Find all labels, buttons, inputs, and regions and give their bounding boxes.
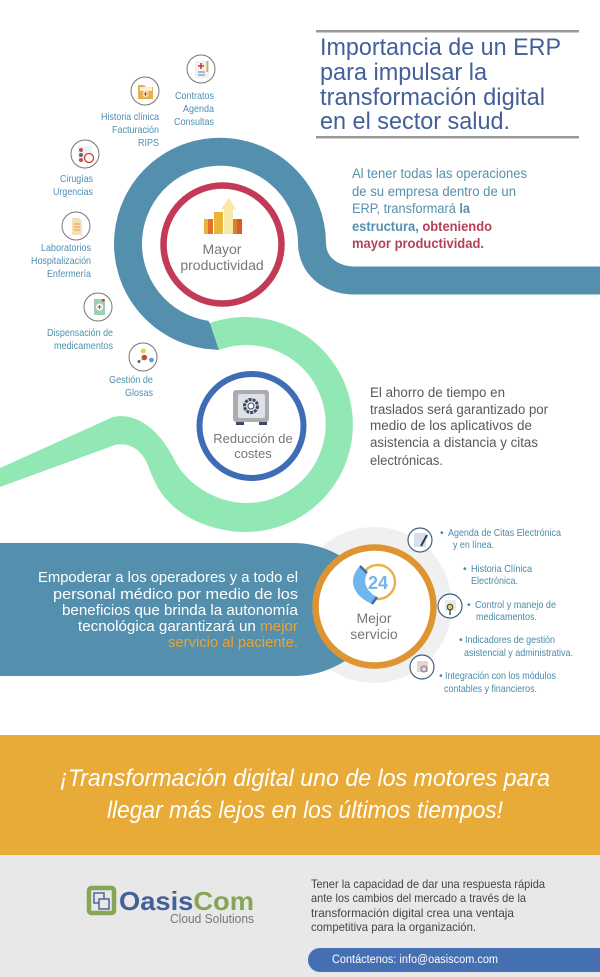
label: dispensacion — [47, 327, 113, 352]
contact bar — [308, 948, 600, 972]
text: ahorro de tiempo: El ahorro de tiempo en — [370, 385, 505, 400]
text: productividad: estructura, obteniendo — [352, 219, 492, 234]
text: footer message: Tener la capacidad de dar una respuesta rápida — [311, 877, 545, 891]
label: mejor servicio: servicio — [350, 626, 398, 642]
list: servicios: contables y financieros. — [444, 683, 537, 695]
title: Importancia de un ERP — [320, 34, 561, 61]
text: ahorro de tiempo: asistencia a distancia y citas — [370, 435, 538, 450]
label: contratos: Contratos — [175, 90, 214, 102]
label: gestion de glosas: Glosas — [125, 387, 153, 399]
logo: oasiscom: OasisCom — [119, 886, 254, 916]
icon: phone 24: 24 — [368, 573, 388, 593]
label: gestion de glosas: Gestión de — [109, 374, 153, 386]
list: servicios: y en línea. — [453, 539, 494, 551]
banner: transformacion digital — [0, 735, 600, 855]
list: servicios: • — [463, 563, 467, 575]
icon: gestion de glosas — [129, 343, 157, 371]
circle: mejor servicio — [316, 548, 434, 666]
circle: mayor productividad — [164, 186, 282, 304]
text: empoderar: personal médico por medio de los — [53, 587, 298, 603]
label: dispensacion: Dispensación de — [47, 327, 113, 339]
icon: cirugias — [71, 140, 99, 168]
label: dispensacion: medicamentos — [54, 340, 113, 352]
list: servicios: Control y manejo de — [475, 599, 556, 611]
circle: reduccion de costes — [200, 374, 304, 478]
list: servicios: Agenda de Citas Electrónica — [448, 527, 561, 539]
label: historia clinica: Historia clínica — [101, 111, 159, 123]
text: ahorro de tiempo — [370, 385, 548, 468]
text: productividad: ERP, transformará la — [352, 201, 470, 216]
text: productividad: de su empresa dentro de un — [352, 184, 516, 199]
icon: laboratorios — [62, 212, 90, 240]
icon: dispensacion — [84, 293, 112, 321]
side labels with icons — [31, 55, 215, 399]
text: productividad — [352, 166, 527, 251]
text: footer message: transformación digital crea una ventaja — [311, 906, 514, 920]
list: servicios: Electrónica. — [471, 575, 518, 587]
icon: safe — [233, 390, 269, 425]
list: servicios: Integración con los módulos — [445, 670, 556, 682]
label: historia clinica — [101, 111, 159, 149]
label: mayor productividad: Mayor — [203, 241, 242, 257]
label: contratos: Consultas — [174, 116, 214, 128]
label: reduccion de costes: Reducción de — [213, 431, 293, 446]
logo: oasiscom — [89, 886, 254, 926]
label: reduccion de costes: costes — [234, 446, 272, 461]
label: laboratorios — [31, 242, 91, 280]
contact bar: Contáctenos: info@oasiscom.com — [332, 954, 498, 966]
text: empoderar: Empoderar a los operadores y a todo el — [38, 570, 298, 586]
list: servicios: • — [440, 527, 444, 539]
icon: agenda — [408, 528, 432, 552]
label: historia clinica: RIPS — [138, 137, 159, 149]
text: ahorro de tiempo: electrónicas. — [370, 453, 443, 468]
footer — [0, 855, 600, 977]
label: contratos: Agenda — [183, 103, 214, 115]
text: empoderar — [38, 570, 299, 651]
list: servicios: • — [467, 599, 471, 611]
list: servicios: Historia Clínica — [471, 563, 532, 575]
label: mayor productividad: productividad — [180, 257, 264, 273]
label: cirugias: Urgencias — [53, 186, 93, 198]
label: historia clinica: Facturación — [112, 124, 159, 136]
logo: oasiscom: Cloud Solutions — [170, 912, 254, 926]
label: laboratorios: Hospitalización — [31, 255, 91, 267]
green ribbon ring — [0, 317, 353, 532]
text: empoderar: tecnológica garantizará un mejor — [78, 619, 298, 635]
text: empoderar: servicio al paciente. — [168, 635, 298, 651]
background disc: mejor servicio — [296, 527, 452, 683]
label: laboratorios: Enfermería — [47, 268, 91, 280]
list: servicios: asistencial y administrativa. — [464, 647, 573, 659]
banner: transformacion digital: llegar más lejos en los últimos tiempos! — [107, 797, 503, 824]
icon: contratos — [187, 55, 215, 83]
list: servicios: medicamentos. — [476, 611, 537, 623]
text: footer message: competitiva para la organización. — [311, 920, 476, 934]
label: cirugias — [53, 173, 93, 198]
icon: control de medicamentos — [438, 594, 462, 618]
banner: transformacion digital: ¡Transformación digital uno de los motores para — [60, 765, 550, 792]
panel: empoderar — [0, 543, 365, 676]
text: footer message: ante los cambios del mercado a través de la — [311, 891, 526, 905]
text: ahorro de tiempo: traslados será garantizado por — [370, 402, 548, 417]
icon: historia clinica — [131, 77, 159, 105]
label: mejor servicio: Mejor — [356, 610, 392, 626]
text: empoderar: beneficios que brinda la autonomía — [62, 603, 299, 619]
list: servicios: • — [439, 670, 443, 682]
label: laboratorios: Laboratorios — [41, 242, 91, 254]
icon: rising bars — [204, 198, 242, 234]
blue ribbon ring — [128, 152, 600, 350]
text: footer message — [311, 877, 545, 934]
text: ahorro de tiempo: medio de los aplicativos de — [370, 418, 532, 433]
text: productividad: Al tener todas las operaciones — [352, 166, 527, 181]
list: servicios: Indicadores de gestión — [465, 634, 555, 646]
list: servicios — [439, 527, 573, 695]
title: transformación digital — [320, 84, 545, 111]
title — [316, 30, 579, 138]
list: servicios: • — [459, 634, 463, 646]
label: cirugias: Cirugías — [60, 173, 93, 185]
label: contratos — [174, 90, 214, 128]
icon: integracion — [410, 655, 434, 679]
title: para impulsar la — [320, 59, 488, 86]
title: en el sector salud. — [320, 108, 510, 135]
text: productividad: mayor productividad. — [352, 236, 484, 251]
label: gestion de glosas — [109, 374, 153, 399]
